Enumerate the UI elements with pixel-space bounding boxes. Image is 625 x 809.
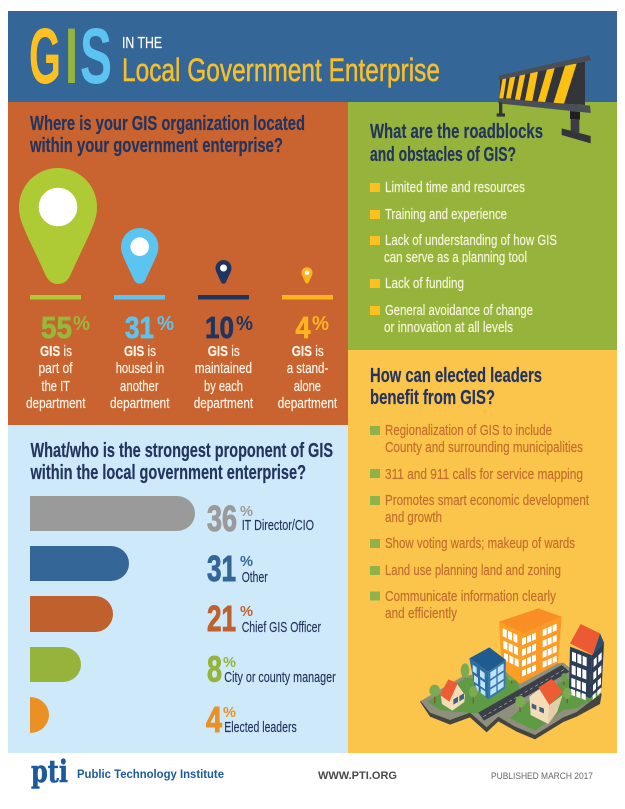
stat: 10 percent: GIS is (208, 343, 240, 360)
tree group front (429, 685, 572, 712)
stat: 4 percent: % (312, 313, 329, 335)
website: WWW.PTI.ORG (318, 770, 397, 782)
icon: yellow pin (302, 267, 312, 284)
list: roadblocks (370, 179, 557, 336)
stat: 31 percent (110, 295, 174, 412)
title: in the: IN THE (122, 35, 162, 52)
list: benefits: Land use planning land and zoning (385, 562, 561, 579)
stat: 10 percent: by each (204, 378, 243, 395)
stat: 10 percent: % (236, 313, 253, 335)
list: roadblocks: Training and experience (385, 206, 507, 223)
building: orange tower (499, 608, 562, 684)
publication date: PUBLISHED MARCH 2017 (491, 771, 593, 782)
building: blue tower (469, 647, 506, 699)
bar: other 31 percent: % (240, 553, 253, 570)
icon: small house (440, 679, 465, 711)
bar: other 31 percent: Other (242, 569, 268, 586)
header banner (8, 11, 617, 102)
stat: 31 percent: GIS is (124, 343, 156, 360)
bar: IT Director 36 percent: 36 (207, 498, 237, 539)
stat: 4 percent (278, 295, 338, 412)
heading: proponent question: within the local government enterprise? (30, 462, 306, 484)
stat: 31 percent: % (157, 313, 174, 335)
list: benefits (370, 422, 590, 622)
stat: 55 percent: 55 (41, 310, 72, 345)
heading: location question (29, 113, 305, 157)
heading: roadblocks question: and obstacles of GIS? (370, 144, 516, 166)
list: benefits: Communicate information clearly (385, 588, 556, 605)
footer (31, 754, 593, 790)
heading: proponent question: What/who is the strongest proponent of GIS (30, 440, 333, 462)
panel: roadblocks (348, 102, 617, 350)
stat: 55 percent: GIS is (40, 343, 72, 360)
bar: city or county manager 8 percent: City or county manager (224, 669, 336, 686)
bar: elected leaders 4 percent (30, 697, 297, 740)
heading: location question: Where is your GIS organization located (30, 113, 305, 135)
heading: roadblocks question (370, 121, 543, 166)
title: GIS: S (80, 11, 112, 100)
stat: 10 percent: maintained (195, 360, 252, 377)
logo: pti: pti (31, 754, 68, 790)
heading: elected leaders question: benefit from GIS? (370, 387, 495, 409)
list: roadblocks: Limited time and resources (385, 179, 525, 196)
illustration: city block (420, 608, 604, 739)
icon: large house (529, 679, 563, 724)
bar: elected leaders 4 percent: Elected leaders (224, 719, 297, 736)
bar: elected leaders 4 percent: 4 (206, 699, 222, 740)
illustration: road barricade (497, 55, 591, 143)
bar: IT Director 36 percent: IT Director/CIO (242, 517, 314, 534)
bar: chief GIS officer 21 percent: % (240, 603, 253, 620)
list: benefits: and growth (385, 509, 442, 526)
panel: strongest proponent (8, 425, 348, 753)
stat: 55 percent: department (26, 395, 86, 412)
stat: 4 percent: a stand- (287, 360, 328, 377)
bar: city or county manager 8 percent (30, 647, 336, 690)
heading: proponent question (30, 440, 333, 484)
heading: location question: within your government enterprise? (29, 135, 283, 157)
stat: 55 percent: part of (38, 360, 73, 377)
list: roadblocks: Lack of understanding of how GIS (385, 232, 557, 249)
stat: 31 percent: 31 (125, 310, 154, 345)
stat: 4 percent: alone (294, 378, 321, 395)
icon: green pin (19, 168, 97, 284)
stat: 10 percent: department (194, 395, 254, 412)
stat: 55 percent: the IT (42, 378, 70, 395)
title: local government enterprise: Local Government Enterprise (122, 52, 440, 88)
building: navy tower with red roof (569, 624, 604, 701)
icon: navy pin (216, 260, 231, 284)
bar: IT Director 36 percent (30, 496, 314, 539)
stat: 10 percent: 10 (205, 310, 234, 345)
heading: elected leaders question: How can elected leaders (370, 365, 542, 387)
title: GIS: I (65, 11, 78, 100)
tree group back (461, 663, 568, 685)
title: GIS: G (29, 11, 61, 100)
bar: chief GIS officer 21 percent: 21 (207, 598, 236, 639)
stat: 31 percent: department (110, 395, 170, 412)
stat: 4 percent: 4 (296, 310, 311, 345)
list: benefits: and efficiently (385, 605, 457, 622)
organization name: Public Technology Institute (77, 767, 224, 781)
bar: city or county manager 8 percent: 8 (207, 648, 222, 690)
stat: 4 percent: GIS is (292, 343, 324, 360)
stat: 55 percent (26, 295, 90, 412)
list: roadblocks: Lack of funding (385, 275, 464, 292)
bar: other 31 percent: 31 (207, 548, 236, 589)
list: roadblocks: General avoidance of change (385, 302, 533, 319)
stat: 31 percent: housed in (116, 360, 164, 377)
stat: 55 percent: % (73, 313, 90, 335)
stat: 31 percent: another (120, 378, 159, 395)
panel: location of GIS organization (8, 102, 348, 425)
bar: city or county manager 8 percent: % (223, 654, 236, 671)
list: benefits: Regionalization of GIS to include (385, 422, 552, 439)
icon: blue pin (121, 228, 158, 284)
bar: chief GIS officer 21 percent (30, 596, 321, 639)
bar: other 31 percent (30, 546, 268, 589)
heading: elected leaders question (370, 365, 542, 409)
stat: 4 percent: department (278, 395, 338, 412)
heading: roadblocks question: What are the roadblocks (370, 121, 543, 143)
list: roadblocks: or innovation at all levels (384, 319, 513, 336)
bar: chief GIS officer 21 percent: Chief GIS Officer (242, 619, 321, 636)
list: roadblocks: can serve as a planning tool (384, 249, 527, 266)
bar: IT Director 36 percent: % (240, 503, 253, 520)
bar: elected leaders 4 percent: % (223, 704, 236, 721)
stat: 10 percent (194, 295, 254, 412)
